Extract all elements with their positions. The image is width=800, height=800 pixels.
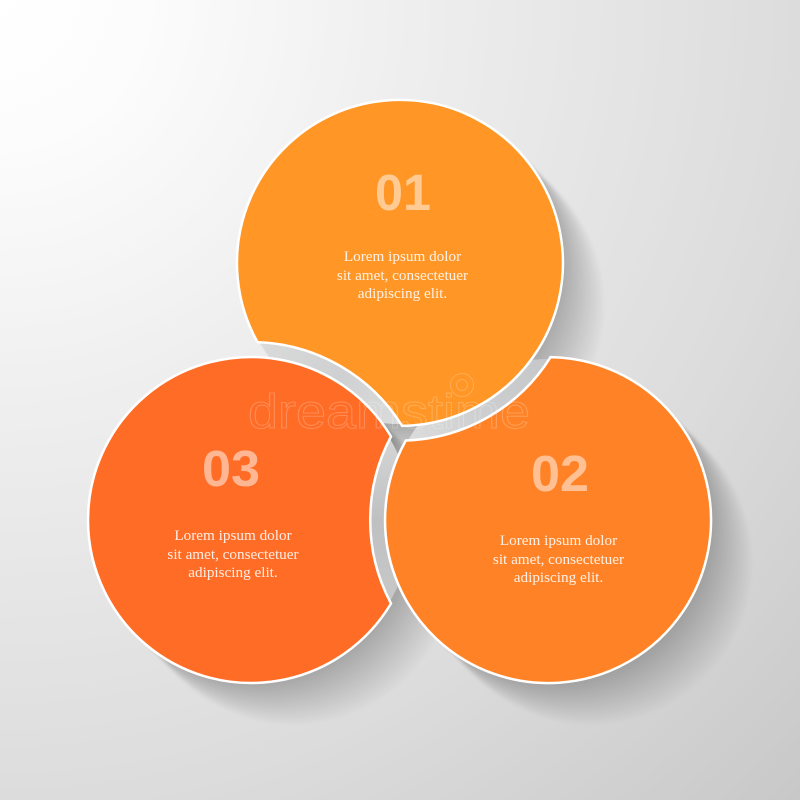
circle 02: 02 <box>531 445 589 502</box>
circle 01: Lorem ipsum dolor <box>344 248 461 265</box>
circle 03: Lorem ipsum dolor <box>174 527 292 544</box>
circle 03: sit amet, consectetuer <box>167 546 299 563</box>
circle 03 <box>88 357 391 683</box>
circle 03: 03 <box>202 440 260 497</box>
circle 02 <box>385 357 711 683</box>
circle 01: sit amet, consectetuer <box>337 267 468 284</box>
circle 02: Lorem ipsum dolor <box>500 532 617 549</box>
circle 01 <box>237 100 563 426</box>
grey gaps between circles <box>90 102 709 681</box>
circle 01: 01 <box>375 164 431 221</box>
circle 03: adipiscing elit. <box>188 564 278 581</box>
circle 01: adipiscing elit. <box>358 285 447 302</box>
long shadows <box>91 103 752 724</box>
circle 02: sit amet, consectetuer <box>493 551 624 568</box>
watermark: dreamstime <box>248 386 530 439</box>
circle 02: adipiscing elit. <box>514 569 603 586</box>
